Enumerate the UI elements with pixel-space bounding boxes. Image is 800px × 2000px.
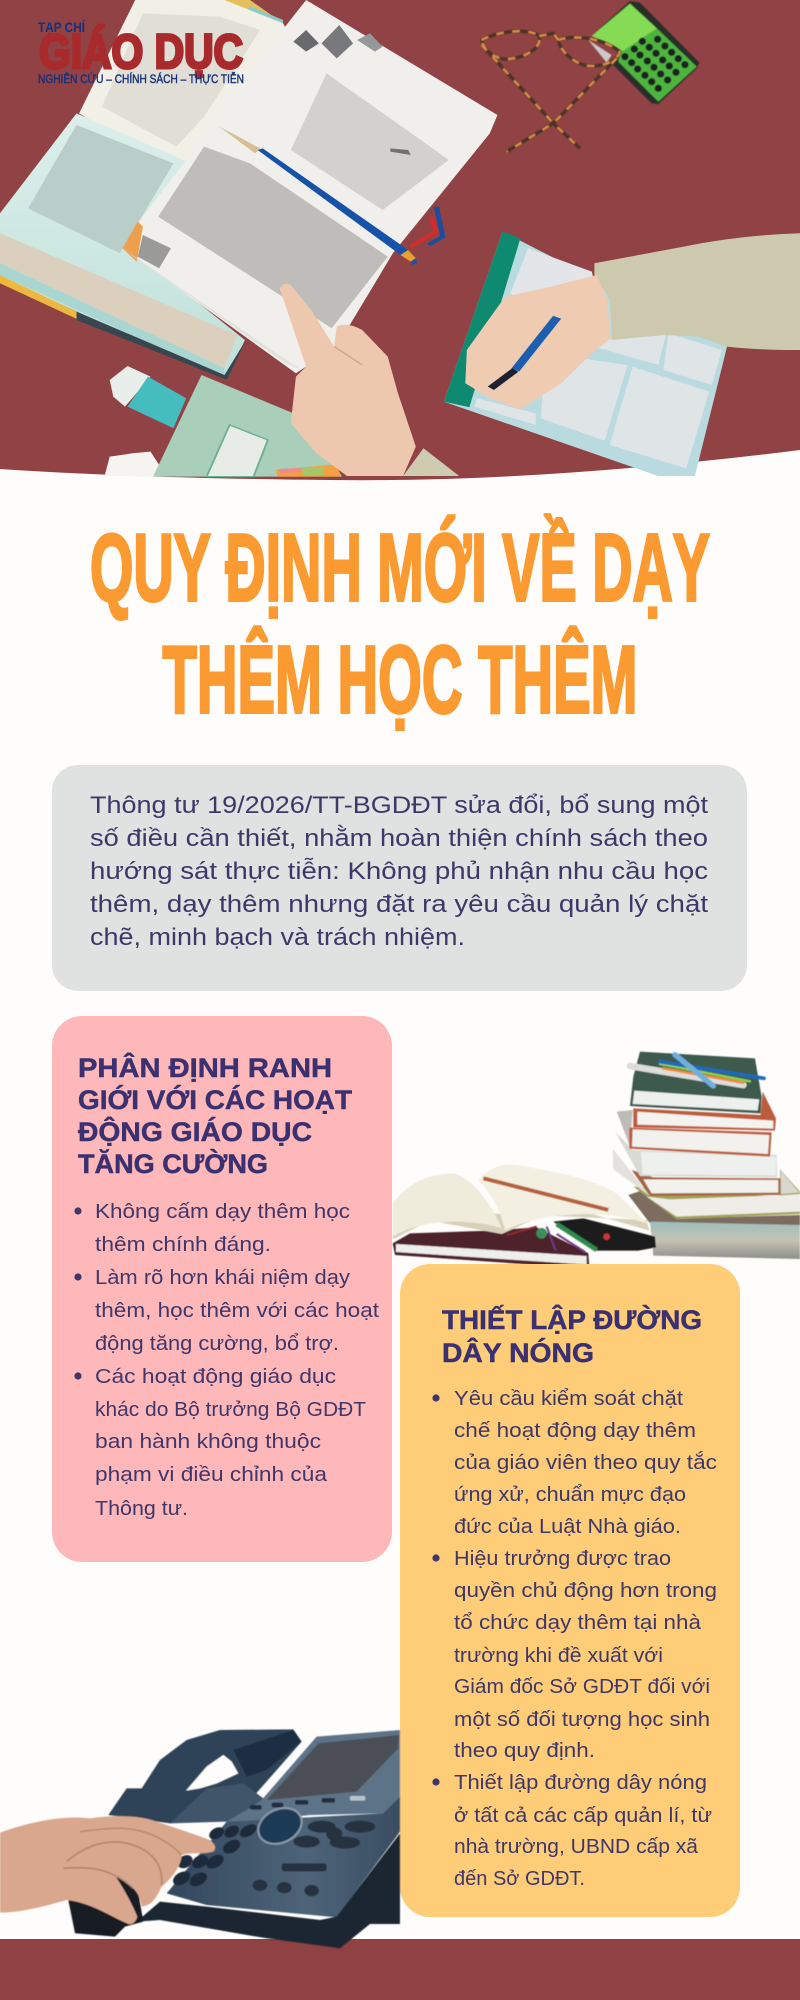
icon: sticky notes xyxy=(276,464,341,477)
pink card bullet list: Thông tư. xyxy=(95,1497,188,1520)
panel: intro xyxy=(52,765,747,991)
pink card bullet list: ban hành không thuộc xyxy=(95,1430,321,1453)
title xyxy=(90,514,710,734)
yellow card bullet list: của giáo viên theo quy tắc xyxy=(454,1451,717,1474)
icon: green calculator xyxy=(592,1,699,104)
icon: crumpled tissue xyxy=(105,452,159,477)
icon: red bound books xyxy=(617,1092,776,1157)
pink card bullet list: thêm, học thêm với các hoạt xyxy=(95,1299,379,1322)
pink card bullet list: Làm rõ hơn khái niệm dạy xyxy=(95,1266,351,1289)
icon: keypad buttons xyxy=(171,1821,259,1889)
icon: keypad under hand xyxy=(68,1872,143,1937)
icon: main open book with printed pages xyxy=(122,0,497,373)
icon: calculator under book xyxy=(553,1218,656,1251)
icon: back open book page xyxy=(79,0,306,200)
icon: open notebook xyxy=(393,1165,649,1239)
yellow card heading: DÂY NÓNG xyxy=(442,1337,594,1368)
image: hand dialing a desk phone xyxy=(0,1729,400,1948)
intro text block: hướng sát thực tiễn: Không phủ nhận nhu cầu học xyxy=(90,858,708,885)
icon: thick bottom book xyxy=(628,1190,800,1259)
icon: pencil on notebook xyxy=(483,1178,608,1210)
yellow card bullet list: đức của Luật Nhà giáo. xyxy=(454,1515,681,1538)
icon: phone handset xyxy=(108,1729,302,1823)
icon: teal open book xyxy=(0,113,246,380)
pink card bullet list: khác do Bộ trưởng Bộ GDĐT xyxy=(95,1398,366,1421)
icon: soft keys xyxy=(250,1796,365,1810)
icon: phone cradle xyxy=(170,1783,263,1823)
intro text block: Thông tư 19/2026/TT-BGDĐT sửa đổi, bổ sung một xyxy=(90,792,708,819)
yellow card bullet list xyxy=(432,1387,717,1890)
logo: NGHIÊN CỨU – CHÍNH SÁCH – THỰC TIỄN xyxy=(38,71,244,86)
icon: eyeglasses xyxy=(482,31,620,152)
icon: green white book xyxy=(615,1132,777,1177)
yellow card bullet list: ứng xử, chuẩn mực đạo xyxy=(454,1483,686,1506)
intro text block xyxy=(90,792,708,951)
icon: pens under book xyxy=(507,1224,597,1252)
intro text block: thêm, dạy thêm nhưng đặt ra yêu cầu quản lý chặt xyxy=(90,891,708,918)
image: stack of books xyxy=(393,1052,800,1268)
header banner background xyxy=(0,0,800,480)
yellow card bullet list: chế hoạt động dạy thêm xyxy=(454,1419,696,1442)
icon: closed maroon book xyxy=(393,1227,589,1268)
pink card bullet list: phạm vi điều chỉnh của xyxy=(95,1463,328,1486)
pink card bullet list xyxy=(74,1200,379,1520)
icon: writing hand with pen xyxy=(465,275,611,409)
yellow card bullet list: Giám đốc Sở GDĐT đối với xyxy=(454,1675,710,1698)
icon: green notebook xyxy=(153,375,342,477)
yellow card bullet list: đến Sở GDĐT. xyxy=(454,1867,585,1890)
icon: olive bound book xyxy=(633,1169,800,1219)
yellow card bullet list: trường khi đề xuất với xyxy=(454,1644,663,1667)
footer band xyxy=(0,1939,800,2000)
icon: pointing hand xyxy=(280,284,459,476)
icon: dark green top book xyxy=(630,1052,762,1113)
pink card heading: GIỚI VỚI CÁC HOẠT xyxy=(78,1084,353,1115)
pink card bullet list: thêm chính đáng. xyxy=(95,1233,271,1256)
intro text block: chẽ, minh bạch và trách nhiệm. xyxy=(90,924,465,951)
icon: pens on top xyxy=(630,1055,764,1086)
yellow card bullet list: Thiết lập đường dây nóng xyxy=(454,1771,707,1794)
logo: TẠP CHÍ xyxy=(38,19,86,35)
intro text block: số điều cần thiết, nhằm hoàn thiện chính sách theo xyxy=(90,825,708,852)
yellow card bullet list: Hiệu trưởng được trao xyxy=(454,1547,671,1570)
icon: book ribbon markers xyxy=(411,207,443,247)
yellow card bullet list: nhà trường, UBND cấp xã xyxy=(454,1835,699,1858)
yellow card heading: THIẾT LẬP ĐƯỜNG xyxy=(442,1304,702,1335)
yellow card bullet list: một số đối tượng học sinh xyxy=(454,1708,710,1731)
icon: highlighter xyxy=(110,366,186,428)
logo xyxy=(38,19,244,86)
icon: phone display xyxy=(267,1735,399,1800)
icon: phone upper face xyxy=(227,1730,400,1822)
yellow card heading xyxy=(442,1304,702,1368)
yellow card bullet list: quyền chủ động hơn trong xyxy=(454,1579,717,1602)
yellow card bullet list: ở tất cả các cấp quản lí, từ xyxy=(454,1804,712,1827)
pink card heading xyxy=(78,1052,353,1179)
icon: phone lower face xyxy=(167,1797,400,1917)
icon: orange edged book xyxy=(613,1148,781,1196)
logo: GIÁO DỤC xyxy=(39,25,243,79)
pink card bullet list: Không cấm dạy thêm học xyxy=(95,1200,350,1223)
calculator keys xyxy=(621,36,689,92)
icon: phone front edge and stand xyxy=(137,1833,400,1948)
pink card heading: ĐỘNG GIÁO DỤC xyxy=(78,1116,312,1147)
icon: dark area under handset xyxy=(233,1730,302,1777)
panel: pink card, distinguishing activities xyxy=(52,1016,392,1562)
pink card bullet list: Các hoạt động giáo dục xyxy=(95,1365,336,1388)
icon: navigation wheel xyxy=(252,1801,308,1851)
icon: function buttons xyxy=(253,1821,375,1896)
icon: blue pencil xyxy=(219,127,417,265)
icon: student worksheet xyxy=(444,232,727,476)
icon: sweater sleeve xyxy=(594,233,800,350)
yellow card bullet list: theo quy định. xyxy=(454,1739,595,1762)
pink card heading: PHÂN ĐỊNH RANH xyxy=(78,1052,332,1083)
panel: yellow card, hotline xyxy=(400,1264,740,1917)
yellow card bullet list: tổ chức dạy thêm tại nhà xyxy=(454,1611,702,1634)
pink card bullet list: động tăng cường, bổ trợ. xyxy=(95,1332,339,1355)
icon: handset gap xyxy=(186,1755,238,1791)
pink card heading: TĂNG CƯỜNG xyxy=(78,1148,268,1179)
yellow card bullet list: Yêu cầu kiểm soát chặt xyxy=(454,1387,683,1410)
icon: dialing hand xyxy=(0,1816,215,1924)
header photo: books and hands xyxy=(0,0,800,477)
